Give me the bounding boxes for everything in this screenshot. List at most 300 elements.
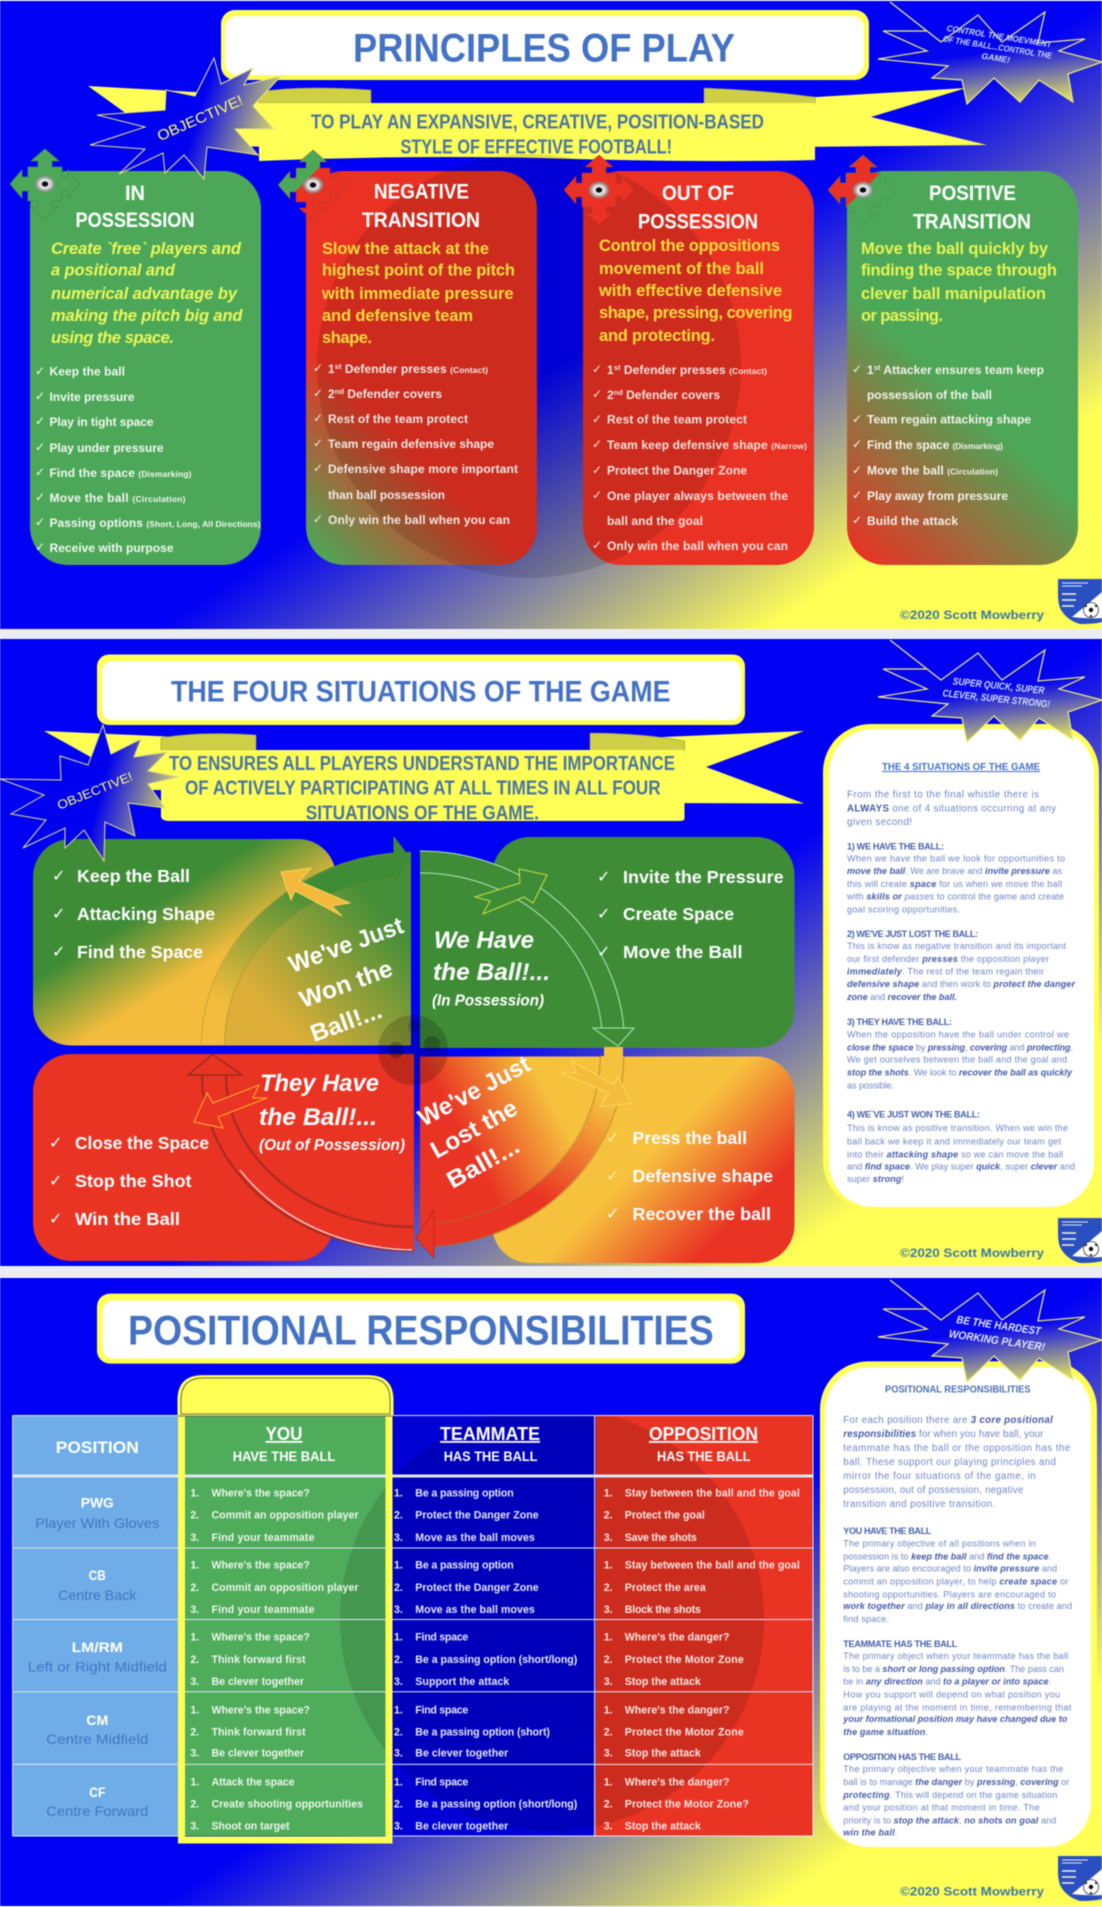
checklist: negative transition: 1 bbox=[328, 362, 335, 376]
column: you have the ball: 1. bbox=[190, 1560, 199, 1572]
objective starburst bbox=[90, 58, 281, 179]
panel: the 4 situations of the game: ALWAYS one of 4 situations occurring at any bbox=[847, 804, 1056, 815]
checklist: in possession: ✓ bbox=[35, 389, 45, 403]
column: opposition has the ball: 3. bbox=[604, 1532, 613, 1544]
column: you have the ball: Attack the space bbox=[212, 1777, 295, 1789]
quote starburst: BE THE HARDEST bbox=[956, 1314, 1043, 1338]
checklist: in possession: Play under pressure bbox=[50, 441, 164, 455]
checklist: in possession: ✓ bbox=[35, 465, 45, 479]
panel: positional responsibilities: responsibilities for when you have ball, your bbox=[843, 1429, 1044, 1440]
column: teammate has the ball: 1. bbox=[394, 1777, 403, 1789]
column: you have the ball: Where’s the space? bbox=[212, 1705, 310, 1717]
heading: out of possession: POSSESSION bbox=[638, 211, 758, 234]
checklist: they have the ball: Win the Ball bbox=[75, 1209, 180, 1229]
column: teammate has the ball: 3. bbox=[394, 1604, 403, 1616]
checklist: in possession: ✓ bbox=[35, 364, 45, 378]
panel: positional responsibilities: transition and positive transition. bbox=[843, 1499, 995, 1510]
checklist: in possession: ✓ bbox=[35, 414, 45, 428]
column: you have the ball: 1. bbox=[190, 1488, 199, 1500]
checklist: lost the ball: ✓ bbox=[606, 1128, 619, 1147]
checklist: in possession: Passing options (Short, Long, All Directions) bbox=[50, 516, 261, 530]
table grid lines bbox=[13, 1416, 813, 1836]
column: opposition has the ball: 3. bbox=[604, 1676, 613, 1688]
title box: POSITIONAL RESPONSIBILITIES bbox=[128, 1306, 714, 1353]
column: opposition has the ball bbox=[604, 1488, 800, 1832]
lead text: negative transition: Slow the attack at the bbox=[322, 240, 489, 258]
panel: positional responsibilities: your formational position may have changed due to bbox=[842, 1714, 1068, 1724]
label: we've just lost the ball: Ball!... bbox=[442, 1132, 524, 1194]
column: teammate has the ball: 1. bbox=[394, 1705, 403, 1717]
column: you have the ball: Where's the space? bbox=[212, 1488, 310, 1500]
column: you have the ball: Think forward first bbox=[212, 1654, 306, 1666]
slide 3: positional responsibilities bbox=[13, 1280, 1102, 1901]
lead text: in possession: using the space. bbox=[51, 329, 174, 347]
panel: the 4 situations of the game: this will create space for us when we move the ball bbox=[847, 879, 1062, 889]
checklist: positive transition: ✓ bbox=[852, 362, 862, 376]
column: teammate has the ball bbox=[394, 1488, 577, 1832]
checklist: positive transition: Build the attack bbox=[867, 514, 958, 528]
slide 1: principles of play bbox=[10, 2, 1102, 624]
checklist: out of possession: st bbox=[614, 363, 621, 372]
column: you have the ball: 2. bbox=[190, 1654, 199, 1666]
column: opposition has the ball: Stay between the ball and the goal bbox=[625, 1560, 800, 1572]
checklist: in possession: Find the space (Dismarking) bbox=[50, 466, 192, 480]
checklist: positive transition: ✓ bbox=[852, 412, 862, 426]
panel: positional responsibilities: TEAMMATE HAS THE BALL bbox=[843, 1639, 958, 1649]
panel: positional responsibilities: The primary objective of all positions when in bbox=[843, 1538, 1036, 1548]
column: teammate has the ball: Move as the ball moves bbox=[415, 1532, 535, 1544]
checklist: lost the ball: Press the ball bbox=[632, 1128, 747, 1148]
position labels: LM/RM bbox=[72, 1639, 123, 1655]
checklist: negative transition: ✓ bbox=[313, 361, 323, 375]
panel: the 4 situations of the game: When the opposition have the ball under control we bbox=[847, 1029, 1069, 1039]
position labels: Centre Back bbox=[58, 1587, 137, 1603]
column: teammate has the ball: 2. bbox=[394, 1727, 403, 1739]
checklist: out of possession: nd bbox=[614, 388, 623, 397]
position labels: CB bbox=[89, 1567, 106, 1583]
panel: positional responsibilities: The primary object when your teammate has the ball bbox=[843, 1651, 1068, 1661]
column: you have the ball: 3. bbox=[190, 1532, 199, 1544]
you column highlight bbox=[178, 1376, 393, 1840]
slide background: four situations bbox=[0, 639, 1102, 1266]
panel: positional responsibilities: priority is to stop the attack, no shots on goal and bbox=[843, 1815, 1056, 1825]
column: teammate has the ball: Find space bbox=[415, 1705, 468, 1717]
checklist: negative transition: ✓ bbox=[313, 436, 323, 450]
title box bbox=[97, 1294, 745, 1364]
panel: the 4 situations of the game: super strong! bbox=[847, 1174, 904, 1184]
column: you have the ball: Where's the space? bbox=[212, 1560, 310, 1572]
lead text: out of possession: Control the oppositions bbox=[599, 237, 780, 255]
header: you have the ball bbox=[233, 1424, 336, 1464]
column: opposition has the ball: 3. bbox=[604, 1748, 613, 1760]
column: you have the ball: Be clever together bbox=[212, 1748, 304, 1760]
column: opposition has the ball: Stop the attack bbox=[625, 1748, 701, 1760]
panel: the 4 situations of the game: as possible. bbox=[847, 1080, 894, 1090]
column: opposition has the ball: Where's the danger? bbox=[625, 1705, 730, 1717]
checklist: negative transition: 2 bbox=[328, 387, 335, 401]
label: we've just won the ball bbox=[285, 912, 407, 1048]
checklist: they have the ball bbox=[49, 1133, 209, 1229]
checklist: negative transition: than ball possession bbox=[328, 488, 445, 502]
column: opposition has the ball: 2. bbox=[604, 1582, 613, 1594]
column: you have the ball: 2. bbox=[190, 1799, 199, 1811]
checklist: they have the ball: ✓ bbox=[49, 1171, 62, 1190]
position labels: Centre Midfield bbox=[46, 1731, 148, 1747]
column: opposition has the ball: 1. bbox=[604, 1777, 613, 1789]
position labels bbox=[28, 1495, 167, 1819]
lead text: negative transition: and defensive team bbox=[322, 307, 473, 325]
column: you have the ball: Commit an opposition player bbox=[212, 1582, 358, 1594]
label: they have the ball bbox=[259, 1070, 405, 1154]
column: opposition has the ball: Where's the danger? bbox=[625, 1632, 730, 1644]
lead text: in possession bbox=[51, 240, 243, 347]
panel: positional responsibilities: ball. These support our playing principles and bbox=[843, 1457, 1056, 1468]
objective starburst bbox=[0, 725, 179, 861]
quote starburst: SUPER QUICK, SUPER bbox=[952, 676, 1046, 697]
slide background: positional responsibilities bbox=[0, 1278, 1102, 1906]
title box: PRINCIPLES OF PLAY bbox=[353, 26, 735, 70]
checklist: out of possession: Defender presses bbox=[621, 363, 729, 377]
column: you have the ball: 1. bbox=[190, 1777, 199, 1789]
checklist: negative transition: Defender presses bbox=[342, 362, 450, 376]
lead text: positive transition: clever ball manipulation bbox=[861, 285, 1046, 303]
header: you have the ball: YOU bbox=[266, 1424, 302, 1444]
checklist: out of possession: 1 bbox=[607, 363, 614, 377]
checklist: out of possession bbox=[592, 362, 807, 553]
position labels: PWG bbox=[81, 1495, 114, 1511]
checklist: positive transition: Move the ball (Circulation) bbox=[867, 464, 998, 478]
column: you have the ball: 3. bbox=[190, 1820, 199, 1832]
lead text: out of possession: shape, pressing, covering bbox=[599, 304, 792, 322]
panel: positional responsibilities: is to be a short or long passing option. The pass can bbox=[843, 1664, 1064, 1674]
position labels: Left or Right Midfield bbox=[28, 1659, 167, 1675]
column: teammate has the ball: 2. bbox=[394, 1510, 403, 1522]
card: negative transition bbox=[306, 171, 537, 565]
panel: positional responsibilities: ball is to manage the danger by pressing, covering or bbox=[843, 1777, 1069, 1787]
column: opposition has the ball: 1. bbox=[604, 1560, 613, 1572]
quadrant: we've just lost the ball bbox=[420, 1056, 794, 1263]
panel: the 4 situations of the game: close the space by pressing, covering and protecting. bbox=[847, 1042, 1073, 1052]
checklist: out of possession: ✓ bbox=[592, 463, 602, 477]
column: teammate has the ball: Be a passing option bbox=[415, 1488, 514, 1500]
column: teammate has the ball: 1. bbox=[394, 1488, 403, 1500]
checklist: out of possession: ✓ bbox=[592, 437, 602, 451]
panel: the 4 situations of the game: defensive shape and then work to protect the danger bbox=[847, 979, 1075, 989]
logo shield bbox=[1058, 1218, 1102, 1263]
checklist: they have the ball: ✓ bbox=[49, 1133, 62, 1152]
column: opposition has the ball: Protect the Motor Zone bbox=[625, 1727, 744, 1739]
panel: the 4 situations of the game: with skills or passes to control the game and create bbox=[846, 891, 1064, 901]
checklist: have the ball bbox=[597, 867, 784, 962]
checklist: positive transition: Play away from pressure bbox=[867, 489, 1008, 503]
slide 2: the four situations of the game bbox=[0, 640, 1102, 1263]
column: teammate has the ball: 1. bbox=[394, 1560, 403, 1572]
checklist: out of possession: 2 bbox=[607, 388, 614, 402]
column: you have the ball: 1. bbox=[190, 1705, 199, 1717]
label: they have the ball: (Out of Possession) bbox=[259, 1137, 405, 1154]
objective starburst: OBJECTIVE! bbox=[55, 770, 135, 812]
panel: positional responsibilities: and your position at that moment in time. The bbox=[843, 1802, 1040, 1812]
checklist: lost the ball: Defensive shape bbox=[632, 1166, 773, 1186]
icon: arrows with eye, in possession bbox=[10, 149, 80, 219]
card: positive transition bbox=[847, 171, 1078, 565]
column: teammate has the ball: 3. bbox=[394, 1676, 403, 1688]
checklist: won the ball: ✓ bbox=[52, 866, 65, 885]
arc arrow: red to red bbox=[188, 1054, 414, 1250]
checklist: won the ball: Find the Space bbox=[77, 942, 203, 962]
panel: the 4 situations of the game: This is know as negative transition and its important bbox=[847, 941, 1066, 951]
panel: positional responsibilities: possession is to keep the ball and find the space. bbox=[843, 1551, 1051, 1561]
column: teammate has the ball: Protect the Danger Zone bbox=[415, 1582, 539, 1594]
position labels: CM bbox=[86, 1712, 108, 1728]
column: teammate has the ball: Find space bbox=[415, 1632, 468, 1644]
header: opposition has the ball: OPPOSITION bbox=[649, 1424, 758, 1444]
column: teammate has the ball: Be clever together bbox=[415, 1748, 508, 1760]
checklist: have the ball: ✓ bbox=[597, 904, 610, 923]
quote starburst: WORKING PLAYER! bbox=[948, 1328, 1046, 1354]
column: teammate has the ball: Support the attack bbox=[415, 1676, 509, 1688]
panel: positional responsibilities: OPPOSITION HAS THE BALL bbox=[843, 1752, 961, 1762]
title box: THE FOUR SITUATIONS OF THE GAME bbox=[171, 675, 670, 708]
panel: the 4 situations of the game: zone and recover the ball. bbox=[846, 992, 957, 1002]
checklist: in possession: ✓ bbox=[35, 440, 45, 454]
quote starburst bbox=[878, 2, 1102, 104]
quote starburst: OF THE BALL...CONTROL THE bbox=[942, 33, 1053, 61]
panel: the 4 situations of the game: When we have the ball we look for opportunities to bbox=[847, 853, 1065, 863]
panel: the 4 situations of the game: into their attacking shape so we can move the ball bbox=[847, 1149, 1063, 1159]
column: teammate has the ball: Be a passing option (short/long) bbox=[415, 1799, 577, 1811]
checklist: in possession: ✓ bbox=[35, 515, 45, 529]
lead text: negative transition bbox=[321, 240, 515, 347]
checklist: they have the ball: Stop the Shot bbox=[75, 1171, 192, 1191]
checklist: won the ball bbox=[52, 866, 215, 962]
panel: positional responsibilities: YOU HAVE THE BALL bbox=[843, 1526, 932, 1536]
label: they have the ball: They Have bbox=[260, 1070, 379, 1097]
column: opposition has the ball: Stay between the ball and the goal bbox=[625, 1488, 800, 1500]
small arrow: gold bbox=[281, 868, 350, 916]
checklist: have the ball: ✓ bbox=[597, 867, 610, 886]
checklist: in possession: Keep the ball bbox=[50, 365, 125, 379]
checklist: positive transition: ✓ bbox=[852, 513, 862, 527]
objective ribbon banner: STYLE OF EFFECTIVE FOOTBALL! bbox=[400, 136, 672, 158]
column: opposition has the ball: 3. bbox=[604, 1820, 613, 1832]
large shadow circle bbox=[317, 154, 741, 578]
column: opposition has the ball: Stop the attack bbox=[625, 1820, 701, 1832]
checklist: out of possession: Team keep defensive shape (Narrow) bbox=[607, 438, 807, 452]
checklist: out of possession: ✓ bbox=[592, 412, 602, 426]
checklist: in possession: Receive with purpose bbox=[50, 541, 174, 555]
header: you have the ball: HAVE THE BALL bbox=[233, 1448, 336, 1464]
checklist: won the ball: Attacking Shape bbox=[77, 904, 215, 924]
panel: positional responsibilities: teammate has the ball or the opposition has the bbox=[843, 1443, 1070, 1454]
column: teammate has the ball: 2. bbox=[394, 1799, 403, 1811]
objective ribbon banner: TO ENSURES ALL PLAYERS UNDERSTAND THE IMPORTANCE bbox=[169, 753, 675, 775]
panel: the 4 situations of the game: stop the shots. We look to recover the ball as quickly bbox=[847, 1067, 1073, 1077]
column: teammate has the ball: Be clever together bbox=[415, 1820, 508, 1832]
header: teammate has the ball: HAS THE BALL bbox=[444, 1448, 538, 1464]
objective ribbon banner bbox=[88, 86, 987, 161]
card: in possession bbox=[30, 171, 261, 565]
small arrow: gold right bbox=[561, 1061, 631, 1107]
lead text: positive transition bbox=[861, 240, 1057, 325]
column: teammate has the ball: 3. bbox=[394, 1532, 403, 1544]
heading: in possession: IN bbox=[125, 182, 145, 205]
lead text: positive transition: finding the space through bbox=[861, 262, 1057, 280]
checklist: have the ball: Invite the Pressure bbox=[623, 867, 784, 887]
checklist: negative transition: (Contact) bbox=[450, 365, 488, 375]
panel: the 4 situations of the game: 3) THEY HAVE THE BALL: bbox=[847, 1017, 952, 1027]
panel: positional responsibilities: How you support will depend on what position you bbox=[843, 1689, 1060, 1699]
label: we have the ball: We Have bbox=[434, 927, 534, 954]
panel: the 4 situations of the game: our first defender presses the opposition player bbox=[847, 954, 1049, 964]
checklist: out of possession: ✓ bbox=[592, 362, 602, 376]
panel: positional responsibilities: win the ball. bbox=[843, 1828, 897, 1838]
objective ribbon banner: OF ACTIVELY PARTICIPATING AT ALL TIMES IN ALL FOUR bbox=[185, 778, 661, 800]
column: you have the ball: 2. bbox=[190, 1582, 199, 1594]
panel: the 4 situations of the game: 2) WE'VE JUST LOST THE BALL: bbox=[847, 929, 978, 939]
panel: positional responsibilities: be in any direction and to a player or into space. bbox=[843, 1676, 1051, 1686]
position labels: Centre Forward bbox=[46, 1803, 148, 1819]
column: you have the ball: 3. bbox=[190, 1676, 199, 1688]
panel: positional responsibilities: the game situation. bbox=[843, 1727, 928, 1737]
checklist: out of possession: One player always between the bbox=[607, 489, 788, 503]
checklist: negative transition: Rest of the team protect bbox=[328, 412, 468, 426]
checklist: in possession: Invite pressure bbox=[50, 390, 135, 404]
arc arrow: green to gold bbox=[420, 862, 634, 1069]
quote starburst: GAME! bbox=[981, 51, 1011, 65]
copyright: ©2020 Scott Mowberry bbox=[900, 1887, 1045, 1899]
lead text: out of possession bbox=[598, 237, 792, 345]
checklist: negative transition: Defender covers bbox=[344, 387, 442, 401]
column: you have the ball: Shoot on target bbox=[212, 1820, 290, 1832]
checklist: positive transition: Find the space (Dismarking) bbox=[867, 438, 1003, 452]
checklist: have the ball: ✓ bbox=[597, 942, 610, 961]
logo shield bbox=[1058, 579, 1102, 624]
column: opposition has the ball: 1. bbox=[604, 1632, 613, 1644]
column: you have the ball: 2. bbox=[190, 1727, 199, 1739]
checklist: negative transition: nd bbox=[335, 387, 344, 396]
label: we've just won the ball: Ball!... bbox=[307, 997, 386, 1048]
title box bbox=[97, 654, 745, 725]
checklist: positive transition: ✓ bbox=[852, 463, 862, 477]
checklist: negative transition: Defensive shape more important bbox=[328, 462, 518, 476]
column: teammate has the ball: Find space bbox=[415, 1777, 468, 1789]
checklist: lost the ball: ✓ bbox=[606, 1204, 619, 1223]
checklist: negative transition: Only win the ball when you can bbox=[328, 513, 510, 527]
table fills bbox=[13, 1407, 813, 1836]
heading: positive transition bbox=[913, 182, 1031, 234]
column: teammate has the ball: 2. bbox=[394, 1654, 403, 1666]
checklist: negative transition: st bbox=[335, 362, 342, 371]
column: teammate has the ball: 3. bbox=[394, 1820, 403, 1832]
checklist: out of possession: ✓ bbox=[592, 488, 602, 502]
header: opposition has the ball bbox=[649, 1424, 758, 1464]
column: you have the ball: Where's the space? bbox=[212, 1632, 310, 1644]
column: opposition has the ball: Protect the Motor Zone? bbox=[625, 1799, 749, 1811]
panel: positional responsibilities: find space. bbox=[843, 1614, 889, 1624]
icon: shadow football bbox=[378, 1015, 448, 1085]
panel: positional responsibilities: are playing at the moment in time, remembering that bbox=[843, 1702, 1072, 1712]
checklist: out of possession: ball and the goal bbox=[607, 514, 703, 528]
panel: positional responsibilities: commit an opposition player, to help create space or bbox=[843, 1576, 1068, 1586]
panel: positional responsibilities: Players are also encouraged to invite pressure and bbox=[843, 1563, 1057, 1573]
column: you have the ball: Find your teammate bbox=[212, 1532, 315, 1544]
quote starburst bbox=[878, 640, 1102, 742]
quadrant: they have the ball bbox=[33, 1054, 414, 1261]
column: opposition has the ball: 3. bbox=[604, 1604, 613, 1616]
panel: the 4 situations of the game: goal scoring opportunities. bbox=[847, 904, 960, 914]
icon: arrows with eye, out of possession bbox=[564, 155, 634, 225]
column: you have the ball: Commit an opposition player bbox=[212, 1510, 358, 1522]
column: teammate has the ball: Protect the Danger Zone bbox=[415, 1510, 539, 1522]
panel: the 4 situations of the game: From the first to the final whistle there is bbox=[847, 789, 1039, 800]
checklist: won the ball: ✓ bbox=[52, 942, 65, 961]
checklist: won the ball: ✓ bbox=[52, 904, 65, 923]
column: opposition has the ball: Save the shots bbox=[625, 1532, 697, 1544]
checklist: out of possession: ✓ bbox=[592, 387, 602, 401]
column: teammate has the ball: Be a passing option bbox=[415, 1560, 514, 1572]
objective ribbon banner: TO PLAY AN EXPANSIVE, CREATIVE, POSITION-BASED bbox=[311, 112, 764, 134]
panel: the 4 situations of the game: We get ourselves between the ball and the goal and bbox=[847, 1055, 1067, 1065]
panel: positional responsibilities: work together and play in all directions to create and bbox=[843, 1601, 1072, 1611]
checklist: in possession: ✓ bbox=[35, 490, 45, 504]
quote starburst bbox=[878, 1280, 1102, 1382]
panel: positional responsibilities: mirror the four situations of the game, in bbox=[843, 1471, 1036, 1482]
label: we've just won the ball: Won the bbox=[296, 955, 396, 1014]
column: teammate has the ball: Be a passing option (short/long) bbox=[415, 1654, 577, 1666]
column: you have the ball: 3. bbox=[190, 1748, 199, 1760]
icon: arrows with eye, negative transition bbox=[278, 150, 348, 220]
lead text: negative transition: highest point of the pitch bbox=[322, 262, 515, 280]
checklist: positive transition: ✓ bbox=[852, 488, 862, 502]
checklist: they have the ball: ✓ bbox=[49, 1209, 62, 1228]
card: out of possession bbox=[583, 171, 814, 565]
lead text: positive transition: or passing. bbox=[861, 307, 943, 325]
column: opposition has the ball: 2. bbox=[604, 1799, 613, 1811]
panel: the 4 situations of the game: THE 4 SITUATIONS OF THE GAME bbox=[882, 761, 1040, 773]
panel: the 4 situations of the game: immediately. The rest of the team regain their bbox=[847, 966, 1044, 976]
checklist: out of possession: Only win the ball when you can bbox=[607, 539, 788, 553]
lead text: in possession: numerical advantage by bbox=[51, 285, 238, 303]
label: we have the ball: the Ball!... bbox=[433, 959, 550, 986]
column: teammate has the ball: Be a passing option (short) bbox=[415, 1727, 550, 1739]
checklist: have the ball: Create Space bbox=[623, 904, 734, 924]
heading: negative transition: NEGATIVE bbox=[374, 180, 469, 204]
panel: the 4 situations of the game: 1) WE HAVE THE BALL: bbox=[847, 842, 944, 852]
objective ribbon banner: SITUATIONS OF THE GAME. bbox=[306, 802, 539, 824]
column: you have the ball: 1. bbox=[190, 1632, 199, 1644]
checklist: negative transition: ✓ bbox=[313, 461, 323, 475]
quadrant: we've just won the ball bbox=[33, 839, 411, 1046]
arc arrow: gold to green bbox=[213, 836, 411, 1045]
label: we have the ball: (In Possession) bbox=[432, 992, 544, 1010]
checklist: positive transition bbox=[852, 362, 1044, 528]
label: we've just lost the ball: Lost the bbox=[426, 1095, 522, 1164]
icon: arrows with eye, positive transition bbox=[828, 155, 898, 225]
column: opposition has the ball: 1. bbox=[604, 1705, 613, 1717]
checklist: negative transition: ✓ bbox=[313, 411, 323, 425]
heading: positive transition: TRANSITION bbox=[913, 211, 1031, 234]
lead text: in possession: making the pitch big and bbox=[51, 307, 243, 325]
checklist: out of possession: Protect the Danger Zone bbox=[607, 464, 747, 478]
quote starburst: CONTROL THE MOEVMENT bbox=[946, 23, 1053, 50]
checklist: in possession: Move the ball (Circulation) bbox=[50, 491, 186, 505]
heading: in possession bbox=[76, 182, 194, 232]
slide background: principles of play bbox=[0, 1, 1102, 629]
column: teammate has the ball: 2. bbox=[394, 1582, 403, 1594]
checklist: out of possession: Defender covers bbox=[623, 388, 720, 402]
objective ribbon banner bbox=[44, 731, 804, 824]
